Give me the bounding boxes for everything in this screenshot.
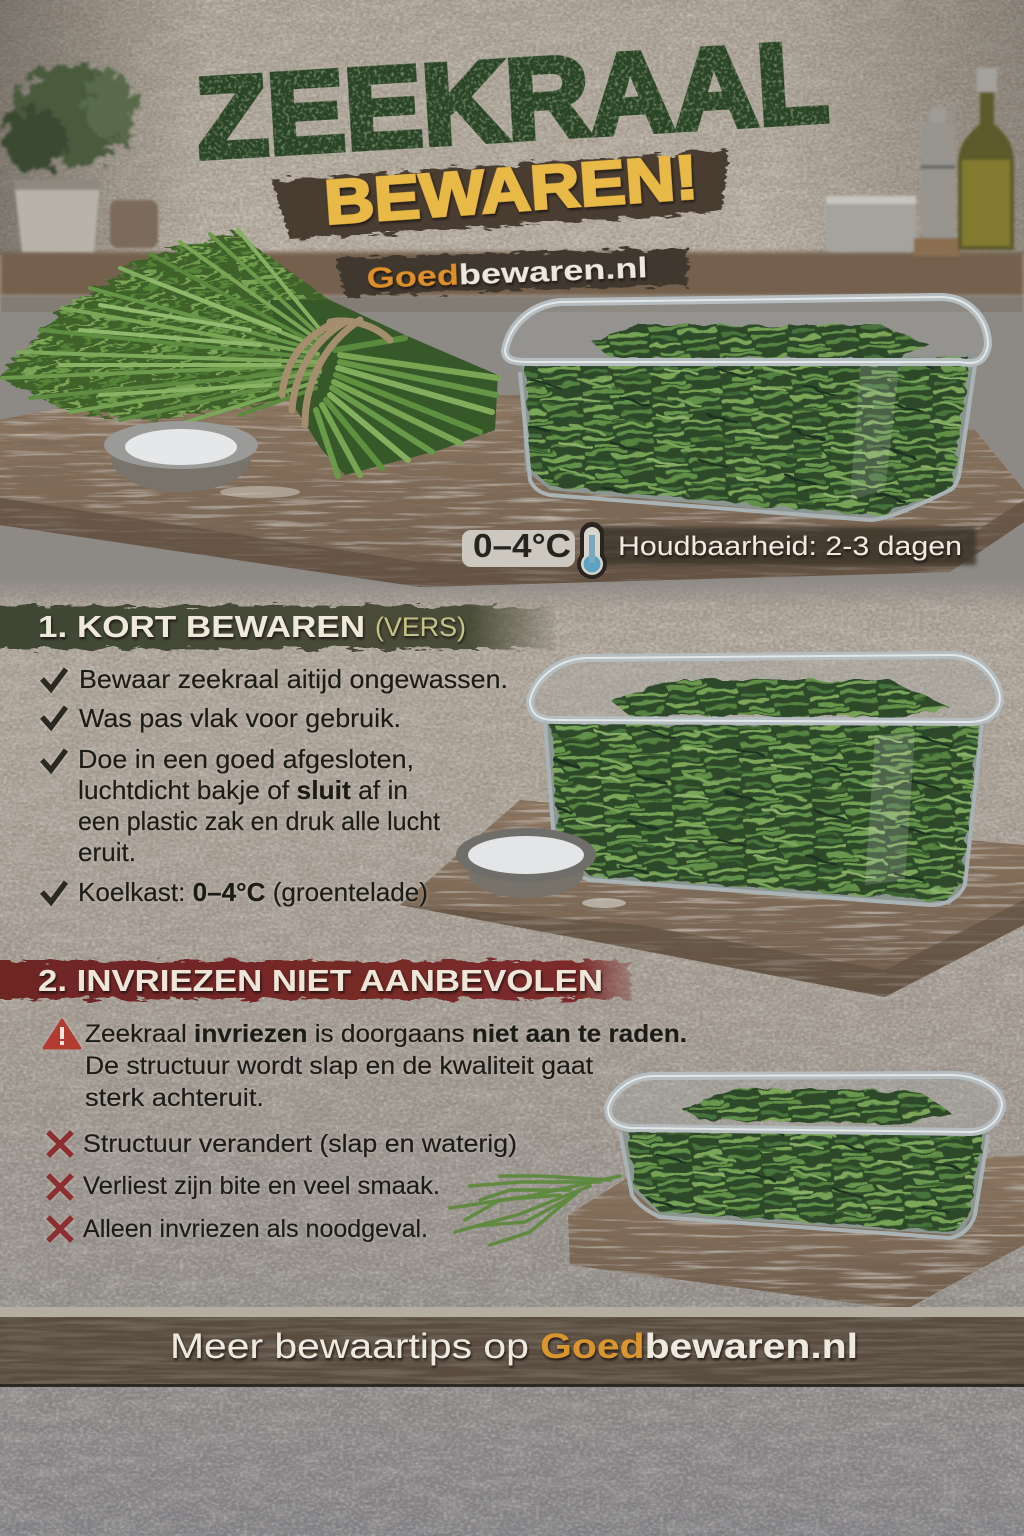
warning text xyxy=(44,1020,687,1112)
kitchen backdrop: shelf and counter xyxy=(0,252,1024,608)
container: bottom xyxy=(608,1075,1002,1238)
heading band 2: 2. INVRIEZEN NIET AANBEVOLEN xyxy=(38,963,603,998)
checklist xyxy=(42,664,508,907)
negative list xyxy=(48,1130,517,1243)
shelf life text: Houdbaarheid: 2-3 dagen xyxy=(618,531,962,561)
footer band xyxy=(0,1307,1024,1387)
wooden board: middle xyxy=(400,800,1024,997)
illustration: zeekraal sprig xyxy=(450,1176,620,1245)
temperature badge: 0–4°C xyxy=(473,527,571,564)
icon: warning triangle xyxy=(44,1020,80,1048)
website banner: Goed bewaren.nl xyxy=(366,252,648,295)
salt bowl middle xyxy=(456,828,626,908)
item: ongewassen: Bewaar zeekraal aitijd ongewassen. xyxy=(79,664,508,694)
title: ZEEKRAAL xyxy=(193,19,831,183)
wooden board: bottom xyxy=(568,1155,1024,1310)
container: middle xyxy=(530,655,1000,905)
footer band: Meer bewaartips op Goed bewaren.nl xyxy=(170,1327,858,1366)
heading band 1: (VERS) xyxy=(375,612,466,642)
item: koelkast: Koelkast: 0–4°C (groentelade) xyxy=(78,877,428,907)
item: structuur: Structuur verandert (slap en waterig) xyxy=(83,1130,517,1158)
container: top xyxy=(505,297,988,520)
rope xyxy=(282,320,390,425)
item: noodgeval: Alleen invriezen als noodgeval. xyxy=(83,1215,428,1243)
website banner xyxy=(335,248,690,296)
icon: thermometer xyxy=(577,522,607,579)
section 2: invriezen niet aanbevolen xyxy=(0,961,687,1243)
item: wassen: Was pas vlak voor gebruik. xyxy=(79,703,401,733)
stems: cut ends xyxy=(316,338,498,476)
warning text: Zeekraal invriezen is doorgaans niet aan te raden. xyxy=(85,1020,687,1048)
warning text: De structuur wordt slap en de kwaliteit gaat xyxy=(85,1052,593,1080)
temperature and shelf life strip xyxy=(462,522,976,579)
decoration: pot, pepper mill and oil bottle xyxy=(826,68,1014,256)
item: luchtdicht xyxy=(42,744,441,867)
stems: left fan xyxy=(2,230,322,424)
item: luchtdicht: Doe in een goed afgesloten, xyxy=(78,744,414,774)
decoration: potted plant xyxy=(3,65,158,252)
item: luchtdicht: luchtdicht bakje of sluit af in xyxy=(78,775,408,805)
wooden board: top xyxy=(0,395,1024,587)
section 1: kort bewaren xyxy=(0,606,555,907)
subtitle banner: BEWAREN! xyxy=(322,143,700,238)
item: luchtdicht: eruit. xyxy=(78,837,136,867)
heading band 1 xyxy=(0,606,555,649)
item: smaak: Verliest zijn bite en veel smaak. xyxy=(83,1172,440,1200)
salt bowl top xyxy=(104,421,300,498)
warning text: sterk achteruit. xyxy=(85,1084,264,1112)
illustration: zeekraal bundle xyxy=(0,230,498,476)
item: luchtdicht: een plastic zak en druk alle lucht xyxy=(78,806,441,836)
heading band 1: 1. KORT BEWAREN xyxy=(38,609,365,644)
